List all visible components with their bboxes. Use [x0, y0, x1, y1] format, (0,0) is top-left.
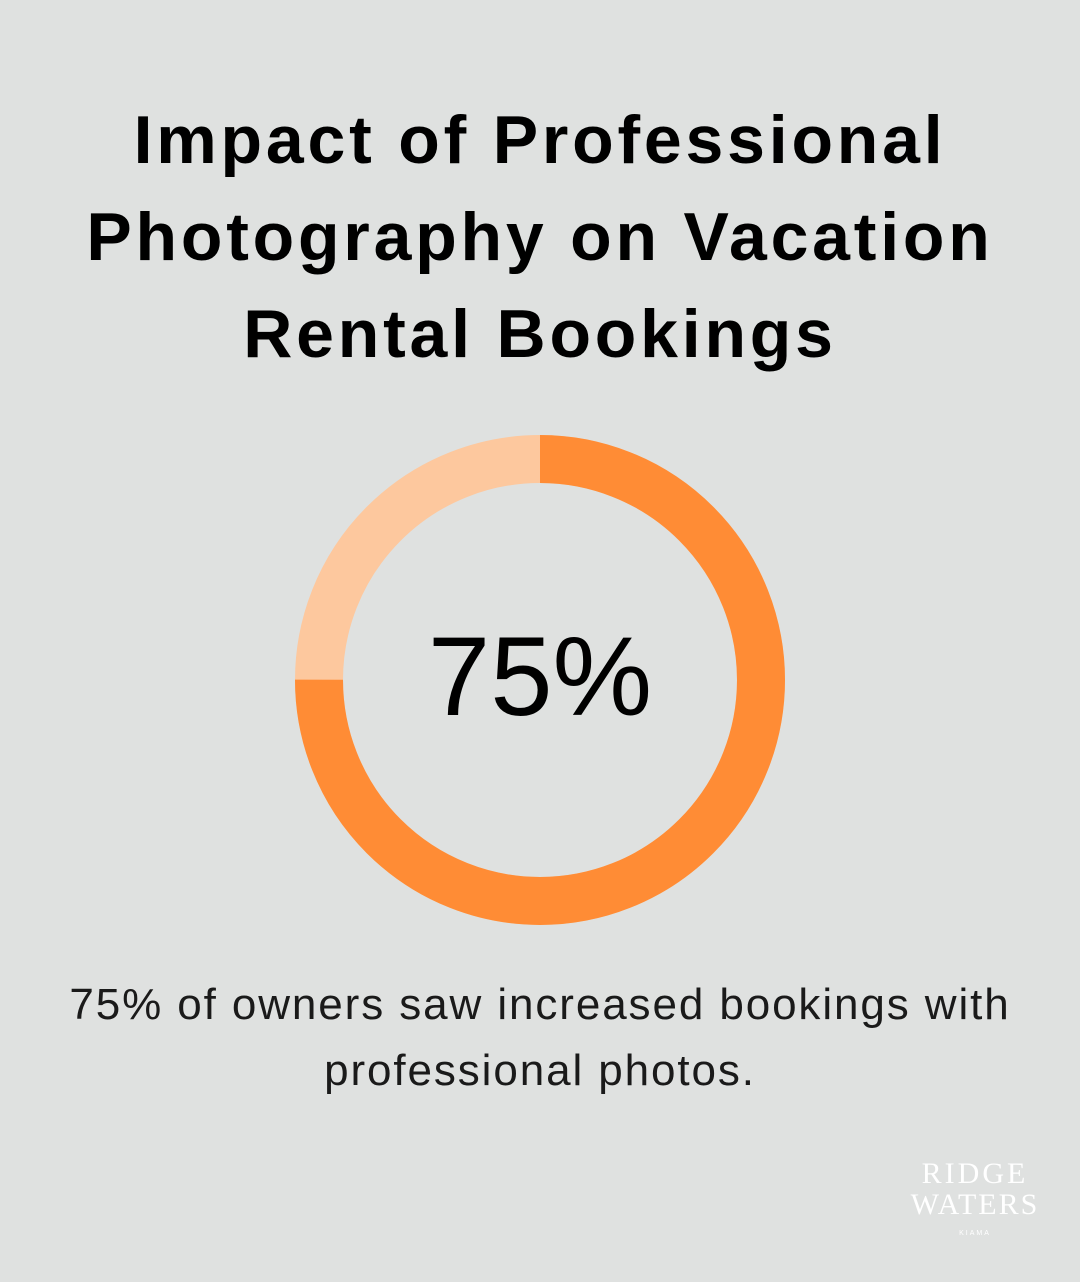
title: Photography on Vacation — [86, 199, 994, 275]
caption: professional photos. — [324, 1046, 756, 1095]
logo — [910, 1157, 1039, 1237]
donut chart: 75% — [428, 614, 652, 739]
title — [86, 102, 994, 372]
logo: WATERS — [911, 1188, 1039, 1221]
caption — [69, 980, 1011, 1095]
title: Impact of Professional — [134, 102, 946, 178]
caption: 75% of owners saw increased bookings with — [69, 980, 1011, 1029]
logo: KIAMA — [959, 1230, 991, 1237]
logo: RIDGE — [922, 1157, 1028, 1190]
title: Rental Bookings — [243, 296, 837, 372]
